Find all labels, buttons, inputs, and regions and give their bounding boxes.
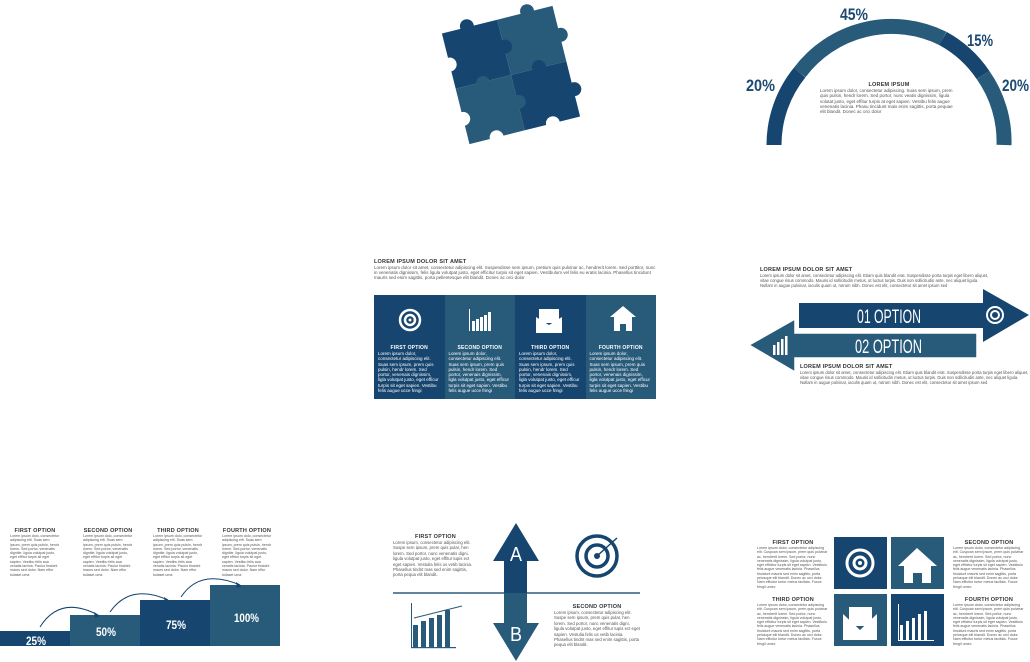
text: Lorem ipsum dolor, consectetur adipiscing elit. Cuspcan sem ipsum, prem quis pulvinar ac, hendrerit lorem. Sed portor, nunc venenatis dignissim, ligula volutpat justo, eget efficitur turpis sit eget sapien. Vestibulu felis augue venenatis lacinia. Phasellus tincidunt mauris sed enim sagittis, porta pelusque elit blandit. Donec ac orci dolor. Nam efficitur tortor metus facilisis. Fusce fringil umec bbox=[757, 603, 828, 646]
text: SECOND OPTION bbox=[84, 528, 132, 534]
arrow text bottom: LOREM IPSUM DOLOR SIT AMET bbox=[800, 364, 892, 370]
grid texts: FIRST OPTION bbox=[773, 540, 813, 546]
text: Lorem ipsum dolo, consectetur adipiscing elit. Suas sem ipsum, prem quis pulsin, hendr lorem. Sed portor, venenatis dignitie. ligula volutpat justo, eget effitur turpis sit eget sapien. Vestibu felis aua venatis lacinia. Paulur tincidnt maurs sed dolor. Nam effur tuilaset uma bbox=[153, 534, 202, 577]
arrow 02: 02 OPTION bbox=[855, 337, 922, 358]
text: Lorem ipsum, consectetur adipiscing elit. Suspe sem ipsum, prem quis pular, hen lorem. Sed portor, nunc venenatis digni, ligula volutpat justo, eget effitur tupis ect eget sapien. Vestulia felis us vetib lacinia. Phasellus tindnt mas sed enim sagittis, porta pequa elit blandit. bbox=[554, 610, 640, 647]
four column panel: SECOND OPTION bbox=[457, 345, 502, 351]
percent labels: 15% bbox=[967, 31, 993, 50]
four column panel: Lorem ipsum dolor, consectetur adipiscing elit. Suas sem ipsum, prem quis pulsin, hendr lorem. Sed portor, venenais dignissim, ligla volutpat justo, eget efficur turpis sit eget sapien. Vestibu felis augue ucce fringi bbox=[448, 351, 509, 393]
four column panel: Lorem ipsum dolor sit amet, consectetur adipiscing elit. Suspendisse sem ipsum, pretium quis pulvinar ac, hendrerit lorem. Sed porttitor, nunc in venenatis dignissim, felis ligula volutpat justo, eget efficitur turpis sit eget sapien. Vestibulum vel felis eu eratis lacinia. Phasellus tincidunt mauris sed enim sagittis, porta pellentesque elit blandit. Donec ac orci dolor bbox=[374, 265, 655, 280]
arrow 02 bbox=[749, 319, 977, 372]
text: Lorem ipsum dolo, consectetur adipiscing elit. Suas sem ipsum, prem quis pulsin, hendr lorem. Sed portor, venenatis dignitie. ligula volutpat justo, eget effitur turpis sit eget sapien. Vestibu felis aua venatis lacinia. Paulur tincidnt maurs sed dolor. Nam effur tuilaset uma bbox=[83, 534, 132, 577]
text: Lorem ipsum dolor, consectetur adipiscing elit. Cuspcan sem ipsum, prem quis pulvinar ac, hendrerit lorem. Sed portor, nunc venenatis dignissim, ligula volutpat justo, eget efficitur turpis sit eget sapien. Vestibulu felis augue venenatis lacinia. Phasellus tincidunt mauris sed enim sagittis, porta pelusque elit blandit. Donec ac orci dolor. Nam efficitur tortor metus facilisis. Fusce fringil umec bbox=[953, 603, 1024, 646]
four column panel: FOURTH OPTION bbox=[599, 345, 643, 351]
percent labels: 45% bbox=[840, 5, 868, 24]
A/B arrow: A bbox=[510, 544, 523, 566]
four column panel: THIRD OPTION bbox=[531, 345, 569, 351]
arrow text bottom: Lorem ipsum dolor sit amet, consectetur adipiscing elit. Etiam quis blandit erat. Suspendisse porta turpis eget libero aliquet, vitae congue risus commodo. Mauris id sollicitudin metus, ut luctus turpis. Duis non sollicitudin ante, nec aliquet ligula. Nullam in augue pulvinar, iaculis quam ut, rutrum nibh. Donec est elit, consectetur sit amet ipsum sed bbox=[800, 370, 1028, 385]
half ring chart bbox=[746, 5, 1029, 146]
staircase chart: 75% bbox=[166, 618, 186, 632]
text: Lorem ipsum dolo, consectetur adipiscing elit. Suas sem ipsum, prem quis pulsin, hendr lorem. Sed portor, venenatis dignitie. ligula volutpat justo, eget effitur turpis sit eget sapien. Vestibu felis aua venatis lacinia. Paulur tincidnt maurs sed dolor. Nam effur tuilaset uma bbox=[222, 534, 271, 577]
A/B texts: Lorem ipsum, consectetur adipiscing elit. Suspe sem ipsum, prem quis pular, hen lorem. Sed portor, nunc venenatis digni, ligula volutpat justo, eget effitur tupis ect eget sapien. Vestulia felis us vetib lacinia. Phasellus tindnt mas sed enim sagittis, porta pequa elit blandit. bbox=[393, 540, 472, 577]
percent labels bbox=[746, 5, 1029, 95]
ring text: LOREM IPSUM bbox=[868, 82, 910, 88]
panel icons bbox=[398, 306, 636, 333]
option arrows bbox=[750, 289, 1029, 371]
A/B texts: FIRST OPTION bbox=[415, 534, 456, 540]
staircase chart bbox=[0, 578, 280, 648]
four column panel bbox=[374, 259, 656, 399]
text: Lorem ipsum dolor, consectetur adipiscing elit. Cuspcan sem ipsum, prem quis pulvinar ac, hendrerit lorem. Sed portor, nunc venenatis dignissim, ligula volutpat justo, eget efficitur turpis sit eget sapien. Vestibulu felis augue venenatis lacinia. Phasellus tincidunt mauris sed enim sagittis, porta pelusque elit blandit. Donec ac orci dolor. Nam efficitur tortor metus facilisis. Fusce fringil umec bbox=[953, 546, 1024, 589]
arrow text top: LOREM IPSUM DOLOR SIT AMET bbox=[760, 267, 852, 273]
arrow 01: 01 OPTION bbox=[857, 307, 921, 328]
puzzle graphic bbox=[442, 4, 582, 144]
grid texts: Lorem ipsum dolor, consectetur adipiscing elit. Cuspcan sem ipsum, prem quis pulvinar ac, hendrerit lorem. Sed portor, nunc venenatis dignissim, ligula volutpat justo, eget efficitur turpis sit eget sapien. Vestibulu felis augue venenatis lacinia. Phasellus tincidunt mauris sed enim sagittis, porta pelusque elit blandit. Donec ac orci dolor. Nam efficitur tortor metus facilisis. Fusce fringil umec bbox=[757, 546, 828, 589]
text: FOURTH OPTION bbox=[965, 597, 1013, 603]
four column panel: FIRST OPTION bbox=[391, 345, 428, 351]
staircase texts bbox=[10, 528, 272, 577]
arrow text top: Lorem ipsum dolor sit amet, consectetur adipiscing elit. Etiam quis blandit erat. Suspendisse porta turpis eget libero aliquet, vitae congue risus commodo. Mauris id sollicitudin metus, ut luctus turpis. Duis non sollicitudin ante, nec aliquet ligula. Nullam in augue pulvinar, iaculis quam ut, rutrum nibh. Donec est elit, consectetur sit amet ipsum sed bbox=[760, 273, 988, 288]
text: SECOND OPTION bbox=[573, 604, 621, 610]
text: Lorem ipsum dolo, consectetur adipiscing elit. Suas sem ipsum, prem quis pulsin, hendr lorem. Sed portor, venenatis dignitie. ligula volutpat justo, eget effitur turpis sit eget sapien. Vestibu felis aua venatis lacinia. Paulur tincidnt maurs sed dolor. Nam effur tuilaset uma bbox=[10, 534, 59, 577]
text: FOURTH OPTION bbox=[223, 528, 271, 534]
ring text: Lorem ipsum dolor, consectetur adipiscing. Suas sem ipsum, prem quis pulsin, hendr lorem. Sed portor, nunc veatis dignissim, ligula volutat justo, eget effitur turpis at eget sapien. Vestibu felis augue venenatis lacinia. Phasu tincidunt mais enim sagittis, porta pequae elit blandit. Donec ac orci dolor bbox=[820, 88, 953, 114]
four column panel: Lorem ipsum dolor, consectetur adipiscing elit. Suas sem ipsum, prem quis pulsin, hendr lorem. Sed portor, venenais dignissim, ligla volutpat justo, eget efficur turpis sit eget sapien. Vestibu felis augue ucce fringi bbox=[519, 351, 579, 393]
text: THIRD OPTION bbox=[772, 597, 814, 603]
icon grid bbox=[834, 537, 944, 646]
text: FIRST OPTION bbox=[15, 528, 55, 534]
text: SECOND OPTION bbox=[965, 540, 1013, 546]
heading: LOREM IPSUM DOLOR SIT AMET bbox=[374, 259, 466, 265]
four column panel: Lorem ipsum dolor, consectetur adipiscing elit. Suas sem ipsum, prem quis pulsin, hendr lorem. Sed portor, venenais dignissim, ligla volutpat justo, eget efficur turpis sit eget sapien. Vestibu felis augue ucce fringi bbox=[590, 351, 650, 393]
four column panel: Lorem ipsum dolor, consectetur adipiscing elit. Suas sem ipsum, prem quis pulsin, hendr lorem. Sed portor, venenais dignissim, ligla volutpat justo, eget efficur turpis sit eget sapien. Vestibu felis augue ucce fringi bbox=[378, 351, 438, 393]
A/B arrow bbox=[393, 523, 640, 661]
staircase chart: 50% bbox=[96, 625, 116, 639]
staircase chart: 25% bbox=[26, 634, 46, 648]
arrow 01 bbox=[799, 289, 1029, 342]
text: THIRD OPTION bbox=[157, 528, 199, 534]
percent labels: 20% bbox=[746, 76, 775, 95]
A/B arrow: B bbox=[510, 624, 522, 646]
staircase chart: 100% bbox=[234, 611, 259, 625]
